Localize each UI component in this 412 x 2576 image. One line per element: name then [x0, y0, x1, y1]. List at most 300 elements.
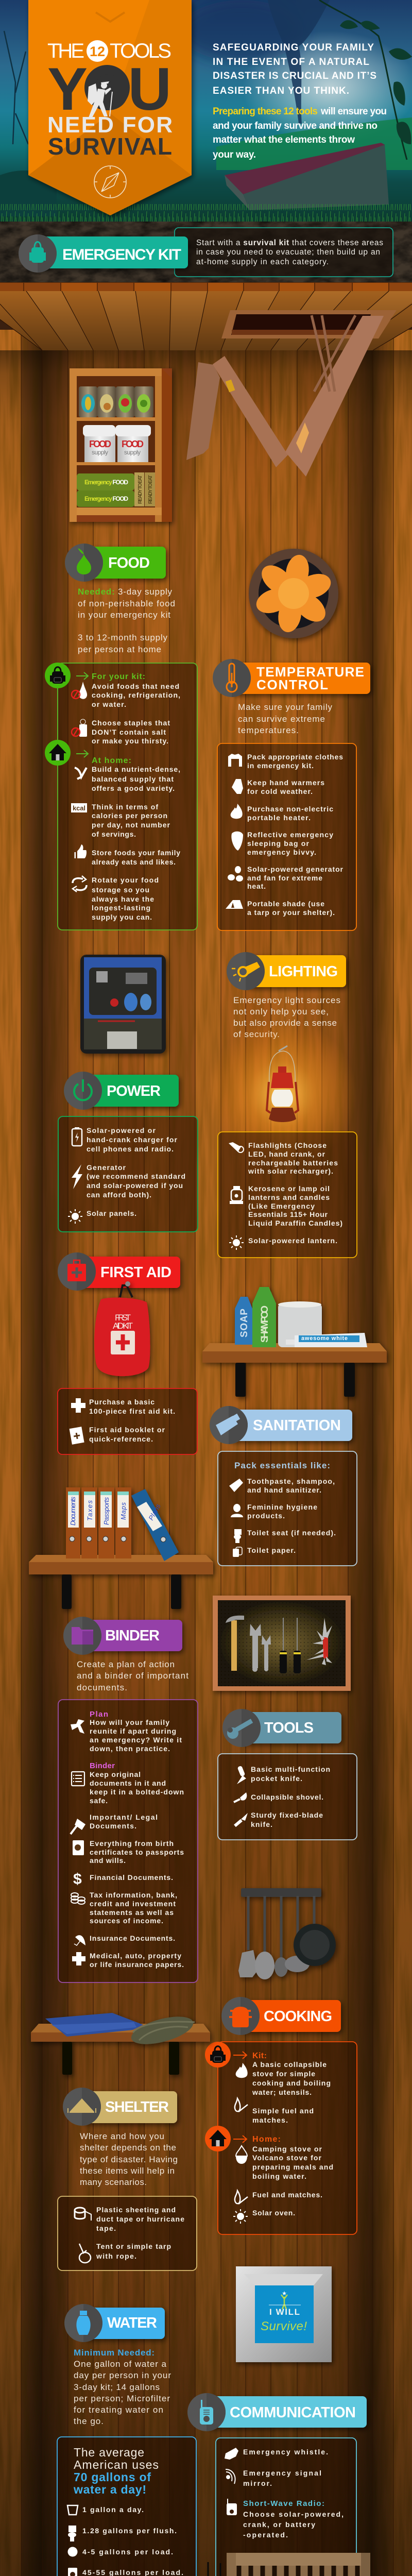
panel: water: [57, 2304, 196, 2576]
power tips box: and solar-powered if you: [87, 1181, 183, 1190]
communication tips box: [216, 2438, 356, 2576]
emergency food packs: READY TO EAT: [138, 475, 143, 504]
orange title banner: [28, 0, 192, 215]
emergency kit badge: EMERGENCY KIT: [62, 246, 181, 263]
panel: temperature control: [213, 659, 370, 930]
icon: umbrella: [74, 1935, 85, 1945]
food tips box: Think in terms of: [92, 803, 158, 811]
illustration: sanitation shelf: [202, 1287, 387, 1397]
lighting description: but also provide a sense: [233, 1018, 337, 1028]
power tips box: can afford both).: [87, 1191, 151, 1199]
temperature description: can survive extreme: [238, 714, 325, 724]
panel: power: [58, 1072, 198, 1232]
hero intro text: your way.: [213, 149, 256, 160]
binder tips box: an emergency? Write it: [90, 1736, 182, 1744]
power tips box: hand-crank charger for: [87, 1136, 178, 1144]
food buckets: FOOD: [89, 439, 111, 449]
water usage box: 1 gallon a day.: [82, 2505, 144, 2514]
binder tips box: Everything from birth: [90, 1839, 174, 1848]
temperature tips box: and fan for extreme: [247, 874, 322, 882]
icon: plus: [71, 1398, 85, 1413]
grass and soil strip: [0, 204, 412, 283]
icon: thumbs up: [74, 844, 87, 858]
food tips box: Store foods your family: [92, 849, 180, 857]
shelter tips box: Plastic sheeting and: [96, 2206, 176, 2214]
binder tips box: statements as well as: [90, 1908, 174, 1917]
temperature tips box: for cold weather.: [247, 787, 313, 795]
icon: cup: [67, 2505, 78, 2515]
icon: fan: [228, 866, 243, 882]
binder tips box: documents in it and: [90, 1779, 166, 1787]
communication tips box: Emergency whistle.: [243, 2448, 328, 2456]
food tips box: supply you can.: [92, 913, 152, 921]
first aid tips box: Purchase a basic: [89, 1398, 154, 1406]
binder tips box: How will your family: [90, 1718, 169, 1726]
panel: lighting tips box: [218, 1132, 357, 1258]
icon: whistle: [225, 2448, 238, 2460]
illustration: ventilation fan: [249, 549, 338, 638]
food tips box: At home:: [92, 756, 131, 765]
title: TOOLS: [110, 40, 171, 62]
icon: pocket knife: [237, 1766, 246, 1784]
water badge: WATER: [107, 2315, 157, 2331]
illustration: binders on shelf: Passports: [102, 1497, 110, 1525]
communication tips box: Choose solar-powered,: [243, 2510, 344, 2518]
temperature tips box: Portable shade (use: [247, 900, 324, 908]
food tips box: already eats and likes.: [92, 858, 176, 866]
panel: first aid: [58, 1252, 197, 1454]
temperature tips box: a tarp or your shelter).: [247, 908, 335, 917]
food tips box: DON’T contain salt: [92, 728, 166, 736]
panel: lighting badge and description: [227, 952, 346, 1039]
icon: oil lantern: [230, 1186, 243, 1204]
icon: fuel and match: [235, 2098, 248, 2112]
binder tips box: Financial Documents.: [90, 1873, 173, 1882]
food buckets: [83, 425, 151, 462]
illustration: bed: [227, 2553, 412, 2576]
panel: lighting tips box: Flashlights (Choose: [248, 1141, 327, 1149]
shelter tips box: tape.: [96, 2224, 116, 2232]
illustration: binders on shelf: Taxes: [86, 1500, 94, 1521]
illustration: glowing lantern: [208, 1019, 357, 1168]
icon: toothpaste: [229, 1479, 243, 1492]
lighting badge: [227, 952, 346, 990]
tools tips box: knife.: [251, 1820, 272, 1828]
binder description: Create a plan of action: [77, 1659, 175, 1669]
icon: rope knot: [79, 2244, 91, 2263]
icon: flashlight: [229, 1142, 244, 1153]
binder badge: [63, 1617, 182, 1655]
first aid tips box: First aid booklet or: [89, 1426, 165, 1434]
title: [47, 40, 173, 160]
food tips box: For your kit:: [92, 672, 145, 681]
temperature tips box: Purchase non-electric: [247, 805, 333, 813]
icon: heater flame: [231, 804, 243, 819]
icon: passport: [73, 1840, 84, 1855]
temperature tips box: in emergency kit.: [247, 761, 314, 770]
emergency food packs: Emergency FOOD: [84, 495, 128, 502]
binder tips box: Important/ Legal: [90, 1813, 158, 1821]
panel: lighting tips box: Solar-powered lantern.: [248, 1236, 337, 1245]
binder tips box: Tax information, bank,: [90, 1891, 177, 1899]
cooking tips box: Fuel and matches.: [252, 2191, 322, 2199]
icon: kcal: [71, 803, 87, 812]
panel: lighting tips box: rechargeable batteries: [248, 1159, 338, 1167]
water usage box: water a day!: [73, 2483, 146, 2496]
temperature control badge: [213, 659, 370, 697]
temperature tips box: Reflective emergency: [247, 831, 333, 839]
title: SURVIVAL: [48, 133, 172, 160]
binder tips box: Plan: [90, 1710, 108, 1719]
emergency food packs: Emergency FOOD: [84, 479, 128, 486]
sanitation tips box: Pack essentials like:: [234, 1461, 330, 1470]
icon: reunite arrows: [71, 1719, 84, 1734]
food tips box: Choose staples that: [92, 719, 170, 727]
water minimum needed text: per person; Microfilter: [74, 2394, 170, 2403]
cooking tips box: [205, 2042, 357, 2234]
illustration: tarp and rope on shelf: [31, 2011, 210, 2075]
emergency kit description box: at-home supply in each category.: [196, 258, 329, 266]
lighting description: of security.: [233, 1029, 280, 1039]
attic hatch and folding ladder: [186, 310, 397, 477]
icon: no water: [72, 682, 87, 699]
panel: food: [45, 544, 197, 930]
icon: toilet paper: [233, 1547, 242, 1557]
panel: lighting tips box: with solar recharger).: [248, 1167, 333, 1175]
food tips box: or make you thirsty.: [92, 737, 168, 745]
headboard: [227, 2553, 370, 2576]
food tips box: of servings.: [92, 830, 136, 838]
food tips box: storage so you: [92, 886, 149, 894]
binder tips box: or life insurance papers.: [90, 1960, 184, 1969]
food tips box: calories per person: [92, 811, 167, 820]
binder description: [77, 1659, 188, 1692]
icon: hiker: [88, 81, 112, 117]
toothpaste tube: awesome white: [301, 1335, 348, 1342]
food needed text: [78, 587, 175, 654]
shelter tips box: [58, 2196, 197, 2270]
brick ceiling trim: [0, 282, 412, 291]
temperature description: [238, 702, 333, 735]
communication tips box: crank, or battery: [243, 2520, 315, 2529]
cooking badge: [221, 1997, 341, 2035]
food needed text: per person at home: [78, 645, 161, 654]
food tips box: Build a nutrient-dense,: [92, 765, 180, 773]
icon: kcal: kcal: [73, 804, 85, 812]
temperature tips box: Pack appropriate clothes: [247, 753, 343, 761]
hero intro text: DISASTER IS CRUCIAL AND IT’S: [213, 71, 376, 81]
sanitation tips box: Toilet paper.: [247, 1546, 296, 1554]
title: 12: [90, 44, 105, 59]
icon: gavel: [71, 1819, 85, 1834]
temperature description: temperatures.: [238, 725, 299, 735]
ceiling planks: [0, 291, 412, 350]
power tips box: Generator: [87, 1163, 126, 1172]
food tips box: or water.: [92, 700, 126, 708]
arrows: [233, 2052, 247, 2143]
panel: shelter: [58, 2088, 197, 2270]
emergency kit description box: Start with a survival kit that covers these areas: [196, 239, 383, 247]
food badge: FOOD: [108, 555, 150, 571]
food tips box: Avoid foods that need: [92, 682, 179, 690]
cooking tips box: Kit:: [252, 2052, 267, 2060]
illustration: first aid bag: [94, 1281, 150, 1376]
food tips box: offers a good variety.: [92, 784, 175, 792]
icon: solar oven sun: [233, 2209, 248, 2224]
food tips box: longest-lasting: [92, 904, 150, 912]
icon: compass: [94, 166, 126, 198]
illustration: hanging kitchen utensils: [238, 1888, 336, 1979]
sanitation badge: [210, 1406, 352, 1444]
water usage box: [57, 2437, 196, 2576]
cooking tips box: Volcano stove for: [252, 2154, 322, 2162]
food tips box: per day, not number: [92, 821, 170, 829]
sanitation tips box: and hand sanitizer.: [247, 1486, 321, 1494]
shelter tips box: duct tape or hurricane: [96, 2215, 184, 2223]
cooking tips box: Camping stove or: [252, 2145, 322, 2153]
emergency food packs: READY TO EAT: [148, 475, 153, 504]
first aid tips box: 100-piece first aid kit.: [89, 1407, 175, 1415]
cooking tips box: Solar oven.: [252, 2209, 295, 2217]
shelter description: Where and how you: [80, 2131, 164, 2141]
icon: dollar sign: $: [73, 1871, 82, 1888]
first aid badge: FIRST AID: [100, 1264, 171, 1281]
food buckets: supply: [92, 449, 108, 456]
food tips box: [45, 663, 197, 930]
first aid tips box: quick-reference.: [89, 1435, 153, 1443]
panel: cooking: [205, 1997, 357, 2234]
icon: toilet: [68, 2526, 76, 2541]
cooking tips box: matches.: [252, 2116, 288, 2124]
screwdrivers: [280, 1618, 301, 1673]
icon: sleeping bag: [231, 832, 243, 851]
sanitation badge: SANITATION: [253, 1417, 341, 1434]
illustration: I will survive framed poster: Survive!: [261, 2319, 307, 2333]
title: YOU: [47, 55, 171, 123]
tools tips box: [218, 1754, 357, 1840]
hammer: [226, 1616, 244, 1671]
icon: lightning bolt: [72, 1164, 82, 1189]
icon: cooking home: [205, 2126, 231, 2151]
binder tips box: Medical, auto, property: [90, 1952, 181, 1960]
panel: hero sky background: [0, 0, 412, 223]
multitool knife: [306, 1618, 332, 1665]
food needed text: in your emergency kit: [78, 610, 170, 620]
shelter description: these items will help in: [80, 2166, 175, 2176]
temperature tips box: sleeping bag or: [247, 839, 310, 848]
icon: document list: [72, 1772, 84, 1786]
icon: fork and leaf: [75, 768, 87, 779]
water minimum needed text: One gallon of water a: [74, 2359, 167, 2369]
icon: battery: [72, 1127, 82, 1146]
house roof illustration: [225, 143, 389, 210]
paper towel roll: [278, 1301, 322, 1347]
communication tips box: Emergency signal: [243, 2469, 321, 2477]
binder tips box: credit and investment: [90, 1900, 176, 1908]
food badge: [65, 544, 166, 582]
temperature tips box: heat.: [247, 882, 266, 890]
shelter description: shelter depends on the: [80, 2143, 176, 2153]
panel: emergency kit intro: [19, 228, 393, 277]
arrows: [76, 672, 88, 757]
binder tips box: keep it in a bolted-down: [90, 1788, 184, 1796]
temperature tips box: emergency bivvy.: [247, 848, 316, 856]
water minimum needed text: Minimum Needed:: [74, 2348, 154, 2358]
water minimum needed text: 3-day kit; 14 gallons: [74, 2382, 160, 2392]
panel: communication: [187, 2393, 367, 2576]
water minimum needed text: [74, 2348, 171, 2426]
icon: shovel: [234, 1792, 247, 1802]
panel: lighting tips box: Kerosene or lamp oil: [248, 1184, 330, 1193]
water usage box: 1.28 gallons per flush.: [82, 2527, 177, 2535]
title: NEED FOR: [47, 112, 173, 138]
illustration: first aid bag: FIRST: [115, 1313, 131, 1323]
food supply shelf: [70, 368, 172, 522]
hero intro text: Preparing these 12 tools: [213, 106, 318, 117]
soap bottle: [235, 1297, 252, 1345]
lighting description: [233, 995, 340, 1039]
icon: washing machine: [68, 2568, 77, 2576]
panel: lighting tips box: Essentials 115+ Hour: [248, 1210, 328, 1218]
tools badge: [222, 1709, 341, 1747]
illustration: binders on shelf: Plans: [147, 1502, 162, 1521]
emergency kit description box: in case you need to evacuate; then build up an: [196, 248, 380, 257]
food needed text: 3 to 12-month supply: [78, 633, 168, 642]
binder tips box: Binder: [90, 1761, 115, 1770]
icon: sun: [68, 1209, 82, 1224]
illustration: binders on shelf: Maps: [119, 1502, 127, 1520]
shelter badge: SHELTER: [105, 2099, 169, 2115]
panel: lighting tips box: LED, hand crank, or: [248, 1150, 325, 1158]
water minimum needed text: day per person in your: [74, 2370, 171, 2380]
icon: duct tape: [75, 2208, 91, 2221]
cooking tips box: boiling water.: [252, 2172, 306, 2180]
power tips box: Solar-powered or: [87, 1126, 156, 1134]
cooking tips box: Simple fuel and: [252, 2107, 314, 2115]
hero intro text: IN THE EVENT OF A NATURAL: [213, 57, 369, 67]
panel: lighting tips box: lanterns and candles: [248, 1193, 330, 1201]
communication badge: COMMUNICATION: [230, 2404, 356, 2421]
tools tips box: pocket knife.: [251, 1774, 302, 1783]
icon: booklet: [70, 1427, 84, 1445]
temperature tips box: portable heater.: [247, 814, 311, 822]
water usage box: 4-5 gallons per load.: [82, 2548, 173, 2556]
shelter description: [80, 2131, 178, 2187]
binder tips box: down, then practice.: [90, 1744, 170, 1753]
sanitation tips box: Feminine hygiene: [247, 1503, 317, 1511]
soap bottle: SOAP: [239, 1309, 250, 1337]
icon: coins: [71, 1893, 85, 1904]
shelter description: type of disaster. Having: [80, 2155, 178, 2164]
cooking badge: COOKING: [264, 2008, 332, 2025]
illustration: red walkie talkies: [196, 2562, 224, 2576]
power tips box: cell phones and radio.: [87, 1145, 174, 1153]
shampoo bottle: SHAMPOO: [260, 1306, 270, 1343]
wrenches: [250, 1624, 271, 1672]
lighting description: Emergency light sources: [233, 995, 340, 1005]
icon: woman: [231, 1504, 243, 1517]
emergency kit badge: [19, 234, 188, 273]
communication badge: [187, 2393, 367, 2431]
title: THE: [47, 40, 84, 62]
water badge: [64, 2304, 165, 2342]
hero intro text: [213, 42, 387, 160]
temperature tips box: [217, 743, 356, 930]
temperature control badge: TEMPERATURE: [256, 664, 364, 680]
icon: dish: [68, 2547, 77, 2556]
icon: home fuel and match: [235, 2191, 248, 2204]
temperature control badge: CONTROL: [256, 677, 328, 692]
icon: stove flame: [236, 2063, 248, 2078]
shelter description: many scenarios.: [80, 2177, 147, 2187]
communication tips box: mirror.: [243, 2479, 272, 2487]
lighting description: not only help you see,: [233, 1007, 329, 1016]
first aid badge: [58, 1252, 180, 1291]
binder tips box: Insurance Documents.: [90, 1934, 175, 1942]
binder tips box: safe.: [90, 1797, 108, 1805]
water usage box: The average: [74, 2446, 144, 2459]
food buckets: supply: [124, 449, 141, 456]
sanitation tips box: products.: [247, 1512, 285, 1520]
temperature tips box: Solar-powered generator: [247, 865, 344, 873]
communication tips box: Short-Wave Radio:: [243, 2499, 324, 2508]
icon: solar lantern sun: [229, 1235, 244, 1250]
cooking tips box: water; utensils.: [252, 2088, 312, 2096]
illustration: tools pegboard: [213, 1596, 351, 1691]
hero intro text: EASIER THAN YOU THINK.: [213, 86, 349, 96]
food tips box: cooking, refrigeration,: [92, 691, 180, 699]
icon: cooking kit backpack: [205, 2042, 231, 2067]
icon: medical plus: [72, 1952, 85, 1965]
temperature tips box: Keep hand warmers: [247, 778, 324, 787]
power tips box: [58, 1116, 198, 1232]
icon: rotate: [73, 876, 87, 892]
sanitation tips box: Toilet seat (if needed).: [247, 1529, 336, 1537]
icon: radio: [227, 2499, 237, 2515]
icon: camping stove: [236, 2146, 247, 2164]
binder tips box: and wills.: [90, 1856, 126, 1865]
food needed text: Needed: 3-day supply: [78, 587, 172, 597]
illustration: I will survive framed poster: I WILL: [269, 2307, 300, 2317]
binder badge: BINDER: [105, 1628, 160, 1644]
cooking tips box: cooking and boiling: [252, 2079, 331, 2087]
shelter tips box: Tent or simple tarp: [96, 2242, 171, 2250]
first aid tips box: [58, 1388, 197, 1454]
tools tips box: Basic multi-function: [251, 1765, 330, 1773]
temperature description: Make sure your family: [238, 702, 333, 712]
food tips box: always have the: [92, 895, 154, 903]
binder description: documents.: [77, 1683, 127, 1692]
shelter tips box: with rope.: [96, 2252, 136, 2260]
shelter badge: [63, 2088, 177, 2126]
chevron: [96, 12, 125, 22]
panel: binder: [58, 1617, 198, 1982]
tools badge: TOOLS: [264, 1720, 314, 1736]
illustration: binders on shelf: Documents: [69, 1496, 77, 1526]
panel: tools: [218, 1709, 357, 1840]
icon: no salt: [72, 719, 87, 737]
tools tips box: Collapsible shovel.: [251, 1793, 323, 1801]
cooking tips box: A basic collapsible: [252, 2060, 327, 2069]
water usage box: 70 gallons of: [74, 2470, 151, 2484]
illustration: I will survive framed poster: [236, 2266, 332, 2362]
binder tips box: [58, 1700, 198, 1982]
binder description: and a binder of important: [77, 1671, 188, 1681]
emergency kit description box: [175, 228, 393, 277]
binder tips box: reunite if apart during: [90, 1727, 176, 1735]
power badge: POWER: [107, 1083, 161, 1099]
panel: lighting tips box: (Like Emergency: [248, 1202, 315, 1210]
